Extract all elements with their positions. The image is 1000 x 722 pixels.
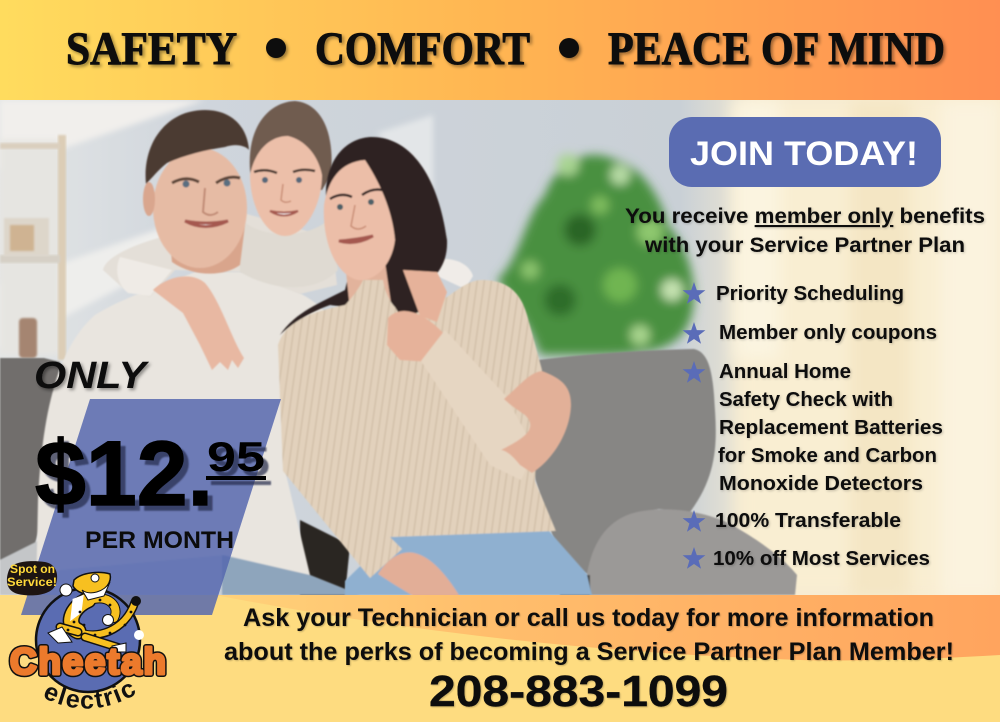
icon: star [683,547,705,569]
benefit: safety check: Safety Check with [719,389,893,411]
woman [278,137,592,600]
logo wordmark: cheetah: Cheetah [10,641,166,682]
benefits intro: You receive member only benefits [625,205,985,228]
girl arm [153,276,244,370]
benefit: safety check: Replacement Batteries [719,417,943,439]
plant [497,154,694,355]
header slogan: SAFETY [66,23,237,75]
sofa [0,349,797,595]
logo wordmark: electric [44,684,135,709]
benefit: priority scheduling: Priority Scheduling [716,283,904,305]
header slogan: COMFORT [315,23,530,75]
girl head [250,101,332,236]
price: 95 [207,433,265,480]
phone number: 208-883-1099 [429,667,728,716]
benefit: discount: 10% off Most Services [713,548,930,570]
call to action text [224,604,954,666]
benefits list [683,282,943,570]
header slogan: PEACE OF MIND [608,23,945,75]
per month label: PER MONTH [85,527,234,554]
icon: star [683,322,705,344]
header banner [0,0,1000,100]
benefits intro [625,205,985,257]
badge: spot on service: Spot on [10,562,55,576]
benefit: transferable: 100% Transferable [715,510,901,532]
benefits intro: with your Service Partner Plan [644,234,965,257]
benefit: safety check [718,361,943,495]
join today button: JOIN TODAY! [690,135,918,173]
badge: spot on service [7,561,57,595]
benefit: safety check: Monoxide Detectors [719,473,923,495]
girl body [103,212,473,297]
price parallelogram [21,399,281,615]
icon: star [683,361,705,383]
benefit: safety check: Annual Home [719,361,851,383]
logo: cheetah electric [6,561,167,709]
join today button [669,117,941,187]
benefit: safety check: for Smoke and Carbon [718,445,937,467]
benefit: coupons: Member only coupons [719,322,937,344]
only label: ONLY [34,355,150,397]
icon: star [683,510,705,532]
call to action text: about the perks of becoming a Service Partner Plan Member! [224,638,954,666]
call to action text: Ask your Technician or call us today for more information [243,604,934,632]
logo wordmark: cheetah: Cheetah [10,641,166,682]
man [30,272,360,595]
mascot: cheetah [48,572,144,652]
logo wordmark: electric: electric [44,684,135,709]
header slogan [66,23,945,75]
family photo [0,100,1000,600]
badge: spot on service: Service! [7,575,57,589]
man head [143,110,249,274]
price: $12. [35,423,213,525]
bottom band [0,595,1000,722]
icon: star [683,282,705,304]
